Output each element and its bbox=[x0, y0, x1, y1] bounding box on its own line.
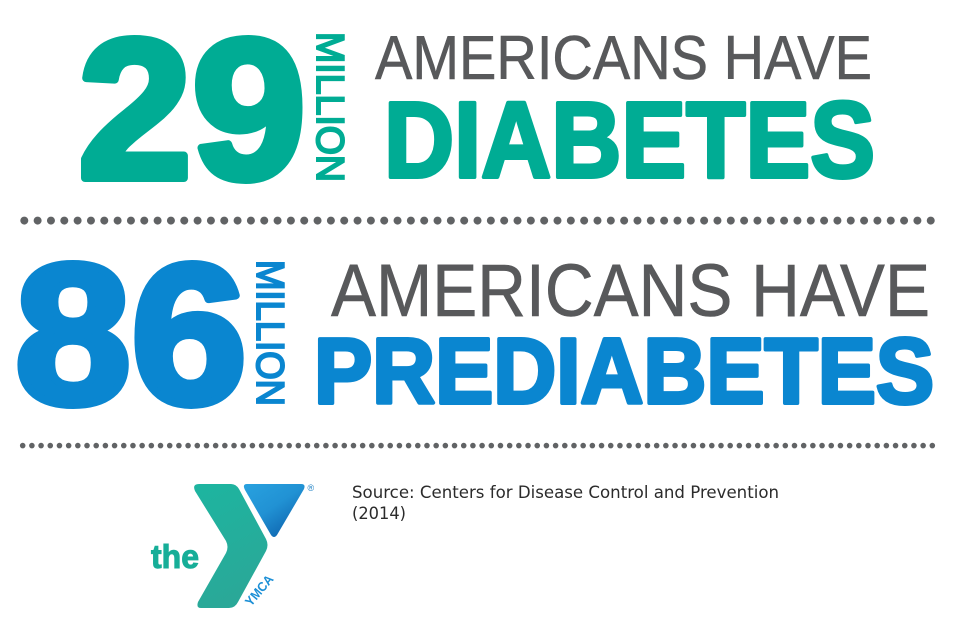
dotted divider two bbox=[23, 443, 932, 448]
statistic row: 86 million prediabetes bbox=[15, 224, 934, 446]
number: 86: 86 bbox=[15, 224, 247, 446]
source citation: Source: Centers for Disease Control and Prevention bbox=[352, 483, 779, 502]
logo word: the: the bbox=[151, 538, 199, 575]
YMCA logo bbox=[151, 483, 314, 609]
number: 29: 29 bbox=[78, 0, 306, 221]
heading: diabetes: DIABETES bbox=[384, 79, 875, 200]
heading: Americans have: AMERICANS HAVE bbox=[375, 24, 872, 93]
logo registered mark: ® bbox=[308, 483, 314, 493]
dotted divider one bbox=[24, 217, 931, 225]
source citation: (2014) bbox=[352, 504, 406, 523]
logo word: YMCA: YMCA bbox=[242, 571, 277, 609]
label: million: MILLION bbox=[248, 260, 291, 406]
source citation bbox=[352, 483, 779, 523]
label: million: MILLION bbox=[308, 32, 351, 182]
logo blue triangle bbox=[244, 484, 305, 537]
logo green chevron bbox=[194, 484, 268, 608]
statistic row: 29 million diabetes bbox=[78, 0, 875, 221]
